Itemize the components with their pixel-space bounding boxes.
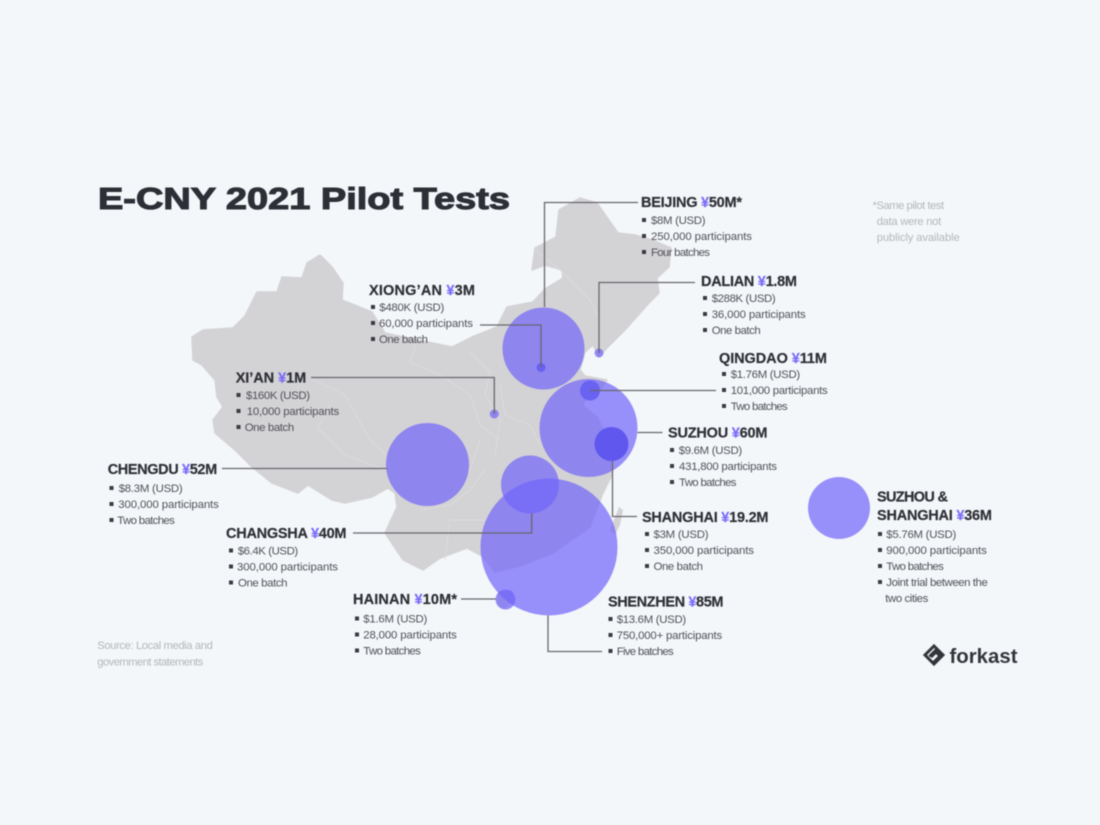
label: Shanghai: SHANGHAI ¥19.2M	[642, 510, 768, 526]
label: Suzhou: $9.6M (USD)	[679, 445, 742, 457]
circle: Xiong'an	[536, 363, 546, 372]
label: Beijing	[641, 195, 752, 259]
label: Shenzhen: $13.6M (USD)	[617, 614, 686, 626]
logo: forkast: forkast	[950, 645, 1018, 668]
label: Qingdao: QINGDAO ¥11M	[719, 351, 827, 367]
leader line: Xi'an	[311, 378, 494, 414]
label: Dalian: DALIAN ¥1.8M	[701, 274, 797, 290]
label: Xi'an: One batch	[245, 422, 294, 434]
leader line: Chengdu	[222, 468, 387, 470]
leader line: Hainan	[461, 598, 496, 600]
label: Suzhou and Shanghai: Two batches	[886, 561, 944, 573]
circle: Beijing	[502, 308, 584, 390]
label: Shanghai: $3M (USD)	[654, 529, 709, 541]
label: Dalian: $288K (USD)	[712, 293, 776, 305]
label: Changsha	[226, 526, 346, 590]
label: Beijing: BEIJING ¥50M*	[641, 195, 742, 211]
leader line: Beijing	[544, 202, 638, 307]
leader line: Shanghai	[612, 461, 637, 516]
label: Dalian: 36,000 participants	[712, 309, 806, 321]
label: Xi'an: XI’AN ¥1M	[236, 370, 306, 386]
label: Chengdu: Two batches	[117, 515, 175, 527]
label: Changsha: One batch	[238, 578, 288, 590]
label: Suzhou and Shanghai: SHANGHAI ¥36M	[877, 508, 992, 524]
label: Suzhou and Shanghai: 900,000 participants	[886, 545, 987, 557]
label: Shenzhen: Five batches	[617, 646, 674, 658]
label: Suzhou	[668, 426, 777, 489]
label: Hainan: Two batches	[363, 646, 421, 658]
label: Qingdao	[719, 351, 828, 413]
label: Shenzhen: SHENZHEN ¥85M	[608, 594, 724, 610]
source note: Source: Local media and	[97, 640, 213, 652]
label: Hainan	[353, 592, 457, 658]
label: Xi'an	[236, 370, 339, 434]
label: Xiong'an: $480K (USD)	[379, 302, 445, 314]
circle: Changsha	[501, 456, 559, 514]
footnote: publicly available	[877, 232, 960, 244]
source note: government statements	[97, 656, 204, 668]
map of China	[192, 198, 671, 609]
label: Shenzhen: 750,000+ participants	[617, 630, 722, 642]
leader line: Xiong'an	[480, 325, 541, 367]
label: Hainan: 28,000 participants	[363, 630, 457, 642]
leader line: Shenzhen	[548, 616, 602, 652]
label: Chengdu: CHENGDU ¥52M	[108, 462, 217, 478]
label: Xiong'an: XIONG’AN ¥3M	[369, 283, 475, 299]
label: Beijing: $8M (USD)	[651, 215, 706, 227]
label: Qingdao: Two batches	[731, 401, 788, 413]
label: Hainan: $1.6M (USD)	[363, 614, 428, 626]
label: Xiong'an: One batch	[379, 334, 428, 346]
label: Shanghai: 350,000 participants	[654, 545, 754, 557]
label: Chengdu: $8.3M (USD)	[119, 483, 183, 495]
label: Chengdu	[108, 462, 219, 527]
footnote: *Same pilot test	[873, 200, 945, 212]
label: Suzhou: Two batches	[679, 477, 737, 489]
label: Dalian	[701, 274, 806, 337]
label: Beijing: 250,000 participants	[651, 231, 752, 243]
leader line: Changsha	[353, 514, 532, 533]
circle: Suzhou	[540, 379, 638, 477]
label: Chengdu: 300,000 participants	[118, 499, 219, 511]
leader line: Dalian	[599, 282, 695, 353]
circle: Qingdao	[580, 380, 600, 400]
footnote: data were not	[877, 216, 942, 228]
title: E-CNY 2021 Pilot Tests	[98, 181, 510, 216]
label: Dalian: One batch	[712, 325, 761, 337]
label: Beijing: Four batches	[651, 247, 710, 259]
label: Changsha: $6.4K (USD)	[238, 546, 298, 558]
circle: Hainan	[496, 590, 516, 610]
label: Xiong'an: 60,000 participants	[379, 318, 473, 330]
label: Qingdao: $1.76M (USD)	[731, 369, 800, 381]
label: Suzhou and Shanghai: Joint trial between the	[886, 577, 988, 589]
label: Xi'an: $160K (USD)	[246, 390, 310, 402]
label: Shanghai	[642, 510, 768, 573]
footnote	[873, 200, 960, 244]
circle: Suzhou and Shanghai joint	[808, 477, 870, 539]
circle: Chengdu	[386, 423, 469, 506]
leader line: Qingdao	[590, 390, 716, 392]
label: Hainan: HAINAN ¥10M*	[353, 592, 457, 608]
source note	[97, 640, 213, 668]
label: Qingdao: 101,000 participants	[731, 385, 828, 397]
label: Suzhou and Shanghai: $5.76M (USD)	[886, 529, 957, 541]
circle: Dalian	[594, 348, 604, 358]
label: Suzhou and Shanghai: two cities	[885, 593, 929, 605]
label: Suzhou: 431,800 participants	[679, 461, 777, 473]
label: Shanghai: One batch	[654, 561, 703, 573]
label: Xi'an: 10,000 participants	[247, 406, 339, 418]
label: Shenzhen	[608, 594, 724, 658]
label: Changsha: 300,000 participants	[237, 562, 338, 574]
label: Changsha: CHANGSHA ¥40M	[226, 526, 346, 542]
leader line: Suzhou	[638, 432, 662, 434]
circle: Xi'an	[490, 410, 499, 418]
label: Xiong'an	[369, 283, 475, 346]
label: Suzhou and Shanghai: SUZHOU &	[877, 490, 949, 506]
label: Suzhou: SUZHOU ¥60M	[668, 426, 768, 442]
circle: Shanghai	[594, 427, 628, 461]
label: Suzhou and Shanghai	[877, 490, 992, 605]
circle: Shenzhen	[480, 478, 618, 616]
